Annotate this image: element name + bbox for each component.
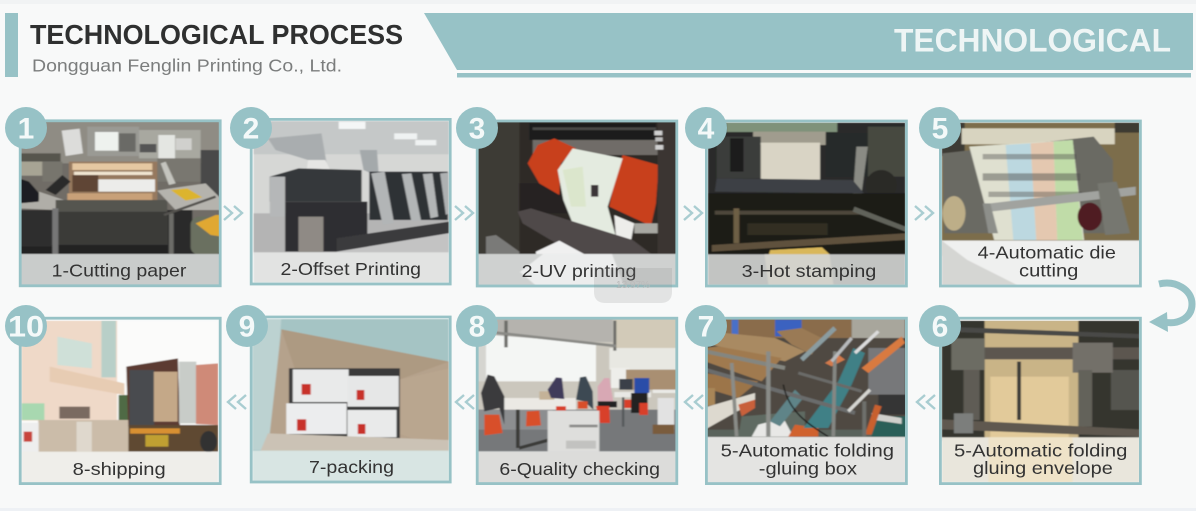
caption lines: gluing envelope	[973, 458, 1113, 478]
number badge 5	[919, 107, 961, 149]
caption line group	[978, 242, 1116, 281]
arrow: step 4 to 5	[915, 206, 933, 220]
number badge 10	[5, 305, 47, 347]
frame	[20, 121, 220, 286]
panel: step 6 folding gluing envelope	[919, 305, 1140, 484]
number badge 3: 3	[469, 112, 485, 146]
number badge 5: 5	[932, 112, 948, 146]
photo: UV printing rollers	[476, 120, 679, 286]
panel: step 9 packing	[226, 305, 450, 482]
caption: 7-packing	[309, 457, 394, 477]
frame	[477, 318, 677, 484]
photo: folder gluer for boxes	[705, 318, 908, 484]
frame	[477, 121, 677, 286]
photo: paper cutting machine	[19, 120, 222, 286]
caption: 2-UV printing	[522, 261, 636, 281]
number badge 4	[685, 107, 727, 149]
caption line group: 4-Automatic die	[978, 242, 1116, 262]
panel: step 3 UV printing	[456, 107, 679, 286]
photo: envelope folding machine	[942, 321, 1140, 482]
subtitle: Dongguan Fenglin Printing Co., Ltd.	[32, 56, 342, 76]
panel: step 7 folding gluing box	[685, 305, 908, 484]
watermark overlay: 13.97%	[616, 280, 650, 291]
header: left title block	[5, 13, 403, 77]
arrow: step 3 to 4	[684, 206, 702, 220]
arrow: step 2 to 3	[455, 206, 473, 220]
frame	[20, 318, 220, 484]
frame	[706, 318, 906, 484]
caption lines	[721, 441, 894, 478]
photo: truck loading at factory	[21, 321, 218, 483]
caption: 8-shipping	[73, 459, 166, 479]
photo: packed carton	[253, 319, 449, 482]
arrow: step 8 to 9	[456, 395, 474, 409]
number badge 1: 1	[18, 112, 34, 146]
arrow: step 1 to 2	[224, 206, 242, 220]
number badge 2: 2	[243, 112, 259, 146]
number badge 6: 6	[932, 310, 948, 344]
photo: quality checking workshop	[476, 318, 679, 484]
number badge 1	[5, 107, 47, 149]
caption lines: -gluing box	[759, 458, 857, 478]
panel: step 1 cutting paper	[5, 107, 222, 286]
banner heading: TECHNOLOGICAL	[894, 23, 1171, 59]
header: right banner	[424, 13, 1193, 78]
title: TECHNOLOGICAL PROCESS	[30, 19, 403, 50]
number badge 9: 9	[239, 310, 255, 344]
number badge 8	[456, 305, 498, 347]
photo: die cutting drum	[942, 123, 1140, 285]
frame	[940, 318, 1140, 484]
number badge 6	[919, 305, 961, 347]
caption lines: 5-Automatic folding	[954, 441, 1127, 461]
caption: 3-Hot stamping	[742, 261, 876, 281]
photo: offset printing press	[253, 121, 449, 283]
caption: 1-Cutting paper	[52, 261, 187, 281]
number badge 8: 8	[469, 310, 485, 344]
number badge 10: 10	[8, 310, 44, 344]
panel: step 2 offset printing	[230, 107, 450, 284]
number badge 9	[226, 305, 268, 347]
photo: hot stamping machine	[708, 123, 905, 285]
panel: step 4 hot stamping	[685, 107, 906, 286]
arrow: step 9 to 10	[228, 395, 246, 409]
panel: step 10 shipping	[5, 305, 220, 484]
number badge 7	[685, 305, 727, 347]
arrow: step 6 to 7	[917, 395, 935, 409]
caption: 2-Offset Printing	[280, 259, 421, 279]
frame	[251, 317, 450, 482]
number badge 7: 7	[698, 310, 714, 344]
arrow: curved turn to row two	[1149, 283, 1192, 332]
caption line group: cutting	[1019, 261, 1078, 281]
caption: 6-Quality checking	[499, 459, 660, 479]
number badge 3	[456, 107, 498, 149]
arrow: step 7 to 8	[685, 395, 703, 409]
number badge 2	[230, 107, 272, 149]
frame	[940, 121, 1140, 286]
panel: step 8 quality checking	[456, 305, 679, 484]
caption lines: 5-Automatic folding	[721, 441, 894, 461]
number badge 4: 4	[698, 112, 715, 146]
watermark overlay	[594, 268, 672, 303]
caption lines	[954, 441, 1127, 478]
frame	[706, 121, 906, 286]
frame	[251, 119, 450, 284]
panel: step 5 die cutting	[919, 107, 1140, 286]
